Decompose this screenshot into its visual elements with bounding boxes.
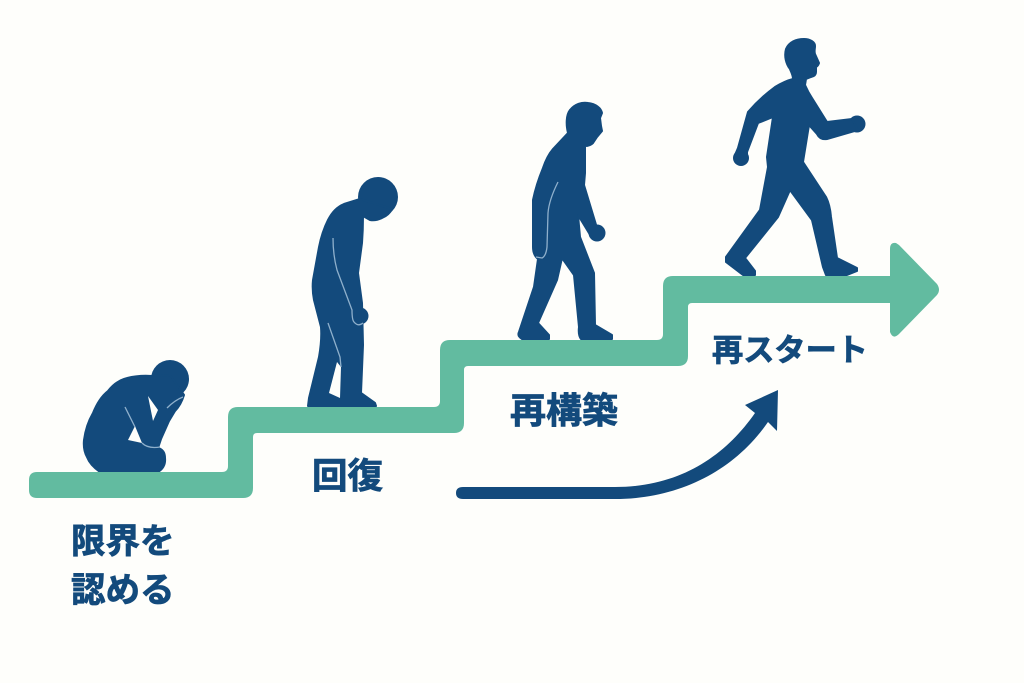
figure: hunched standing person — [308, 177, 398, 406]
staircase arrow — [29, 243, 939, 498]
label: step 4: 再スタート — [712, 333, 868, 368]
upward curved arrow — [456, 390, 778, 499]
figure: walking person, slightly stooped — [518, 103, 612, 339]
label: step 2: 回復 — [312, 456, 383, 496]
label: step 1: 限界を — [71, 523, 174, 561]
label: step 1 — [71, 523, 174, 610]
figure: confident walking person — [726, 39, 866, 275]
label: step 1: 認める — [71, 572, 174, 610]
figure: crouching person holding head — [84, 360, 189, 472]
label: step 3: 再構築 — [510, 390, 618, 431]
